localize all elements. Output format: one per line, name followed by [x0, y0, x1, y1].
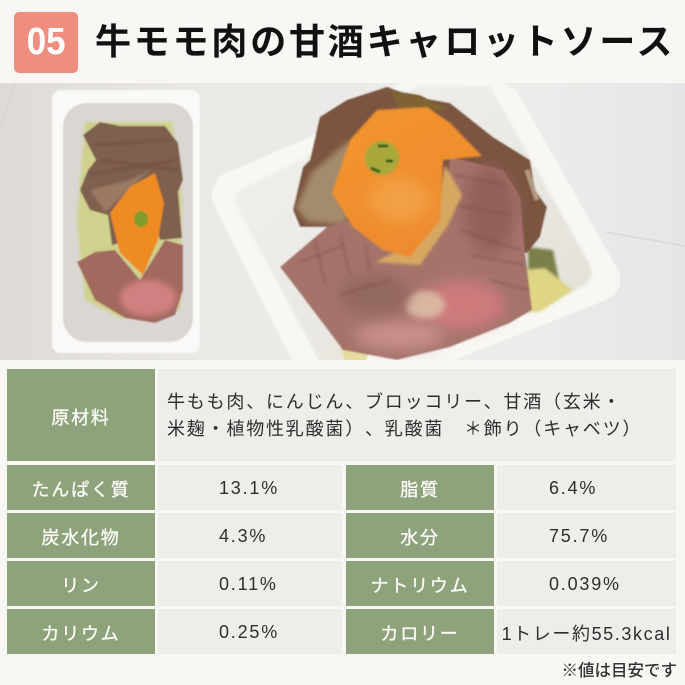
dish meat back	[293, 87, 547, 253]
sodium label	[346, 561, 494, 606]
phosphorus value: 0.11%	[219, 574, 278, 594]
header	[14, 12, 675, 73]
ingredients text: 牛もも肉、にんじん、ブロッコリー、甘酒（玄米・	[167, 392, 622, 412]
calorie value	[497, 609, 676, 654]
calorie label	[346, 609, 494, 654]
protein value: 13.1%	[219, 478, 279, 498]
carbohydrate value	[158, 513, 342, 558]
dish photo: bowl with meat	[212, 83, 620, 362]
calorie label: カロリー	[380, 624, 460, 644]
carbohydrate label	[7, 513, 155, 558]
moisture label	[346, 513, 494, 558]
fat label	[346, 465, 494, 510]
fat value	[497, 465, 676, 510]
fat label: 脂質	[400, 480, 440, 500]
carbohydrate value: 4.3%	[219, 526, 267, 546]
sodium label: ナトリウム	[370, 576, 470, 596]
nutrition table	[7, 369, 676, 654]
dish meat front	[280, 157, 532, 360]
number badge: 05	[27, 21, 65, 63]
ingredients text: 米麹・植物性乳酸菌）、乳酸菌 ＊飾り（キャベツ）	[167, 419, 642, 439]
photo band	[0, 83, 685, 360]
moisture label: 水分	[400, 528, 440, 548]
title: 牛モモ肉の甘酒キャロットソース	[95, 21, 675, 62]
carbohydrate label: 炭水化物	[41, 528, 121, 548]
potassium value	[158, 609, 342, 654]
tray meat top	[80, 122, 183, 245]
moisture value	[497, 513, 676, 558]
tray meat bottom	[77, 240, 183, 323]
broccoli garnish	[365, 141, 399, 175]
moisture value: 75.7%	[549, 526, 609, 546]
potassium label: カリウム	[41, 624, 121, 644]
ingredients label: 原材料	[51, 408, 111, 428]
protein value	[158, 465, 342, 510]
sodium value	[497, 561, 676, 606]
protein label: たんぱく質	[32, 480, 130, 500]
ingredients text	[158, 369, 676, 461]
sodium value: 0.039%	[549, 574, 621, 594]
phosphorus value	[158, 561, 342, 606]
protein label	[7, 465, 155, 510]
product photo: tray	[52, 90, 200, 353]
number badge	[14, 12, 78, 73]
phosphorus label: リン	[61, 576, 101, 596]
phosphorus label	[7, 561, 155, 606]
tray sauce	[110, 173, 164, 275]
fat value: 6.4%	[549, 478, 597, 498]
calorie value: 1トレー約55.3kcal	[502, 624, 671, 644]
dish sauce	[375, 165, 462, 265]
footnote: ※値は目安です	[562, 662, 677, 680]
dish bed of cabbage	[528, 247, 560, 290]
ingredients label	[7, 369, 155, 461]
potassium value: 0.25%	[219, 622, 279, 642]
potassium label	[7, 609, 155, 654]
